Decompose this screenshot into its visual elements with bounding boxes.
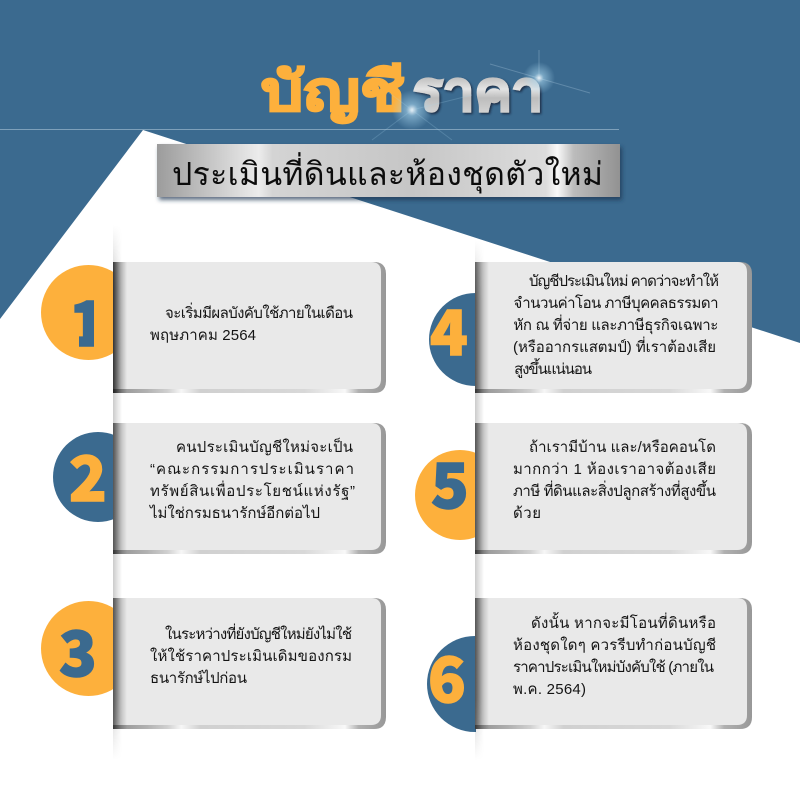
card 4: หัก ณ ที่จ่าย และภาษีธุรกิจเฉพาะ	[513, 314, 718, 335]
number 4: 4	[430, 283, 468, 373]
circle 2	[53, 432, 113, 522]
number 3: 3	[59, 604, 97, 694]
card 2: “คณะกรรมการประเมินราคา	[150, 461, 354, 478]
step 3	[41, 598, 386, 729]
card 4 text: บัญชีประเมินใหม่ คาดว่าจะทำให้	[529, 272, 719, 290]
icon: sparkle left	[372, 90, 472, 140]
card 3: ให้ใช้ราคาประเมินเดิมของกรม	[150, 647, 352, 665]
number 2: 2	[69, 429, 107, 519]
card 5: ด้วย	[513, 505, 541, 522]
card 4	[475, 262, 752, 393]
title	[261, 62, 543, 123]
subtitle banner	[157, 144, 620, 197]
circle 1	[41, 265, 113, 360]
card 6	[475, 598, 752, 729]
number 6: 6	[428, 630, 466, 720]
circle 5	[415, 450, 475, 540]
card 5: ภาษี ที่ดินและสิ่งปลูกสร้างที่สูงขึ้น	[513, 480, 716, 500]
number 5: 5	[431, 436, 469, 526]
card 6: พ.ค. 2564)	[513, 681, 586, 698]
card 2	[113, 423, 386, 554]
card 6: ราคาประเมินใหม่บังคับใช้ (ภายใน	[513, 658, 714, 676]
circle 4	[429, 293, 475, 386]
step 4	[429, 262, 752, 393]
card 3 text: ในระหว่างที่ยังบัญชีใหม่ยังไม่ใช้	[165, 623, 352, 643]
title: silver word: ราคา	[413, 62, 543, 122]
card 1	[113, 262, 386, 393]
step 2	[53, 423, 386, 554]
step 5	[415, 423, 752, 554]
card 2: ทรัพย์สินเพื่อประโยชน์แห่งรัฐ”	[150, 480, 355, 500]
card 2: ไม่ใช่กรมธนารักษ์อีกต่อไป	[149, 504, 320, 522]
number 1: 1	[69, 274, 107, 364]
card 1 text: จะเริ่มมีผลบังคับใช้ภายในเดือน	[165, 302, 353, 322]
step 1	[41, 262, 386, 393]
title: orange word: บัญชี	[261, 62, 405, 123]
card 5 text: ถ้าเรามีบ้าน และ/หรือคอนโด	[529, 438, 716, 456]
card 3	[113, 598, 386, 729]
card 2 text: คนประเมินบัญชีใหม่จะเป็น	[176, 437, 353, 456]
card 3: ธนารักษ์ไปก่อน	[150, 669, 247, 687]
subtitle text: ประเมินที่ดินและห้องชุดตัวใหม่	[172, 152, 603, 194]
card 5: มากกว่า 1 ห้องเราอาจต้องเสีย	[513, 461, 716, 478]
card 4: สูงขึ้นแน่นอน	[514, 358, 592, 378]
card 1: พฤษภาคม 2564	[150, 327, 256, 344]
circle 6	[427, 636, 476, 732]
card 6 text: ดังนั้น หากจะมีโอนที่ดินหรือ	[531, 612, 716, 632]
card 4: จำนวนค่าโอน ภาษีบุคคลธรรมดา	[514, 294, 719, 313]
step 6	[427, 598, 752, 732]
header divider line	[0, 129, 619, 130]
card 4: (หรืออากรแสตมป์) ที่เราต้องเสีย	[513, 336, 716, 356]
blue header shape	[0, 0, 800, 343]
card 5	[475, 423, 752, 554]
circle 3	[41, 601, 113, 696]
vertical shadow strip right	[475, 250, 482, 749]
card 6: ห้องชุดใดๆ ควรรีบทำก่อนบัญชี	[513, 636, 716, 655]
icon: sparkle right	[490, 50, 590, 112]
vertical shadow strip left	[113, 236, 120, 749]
